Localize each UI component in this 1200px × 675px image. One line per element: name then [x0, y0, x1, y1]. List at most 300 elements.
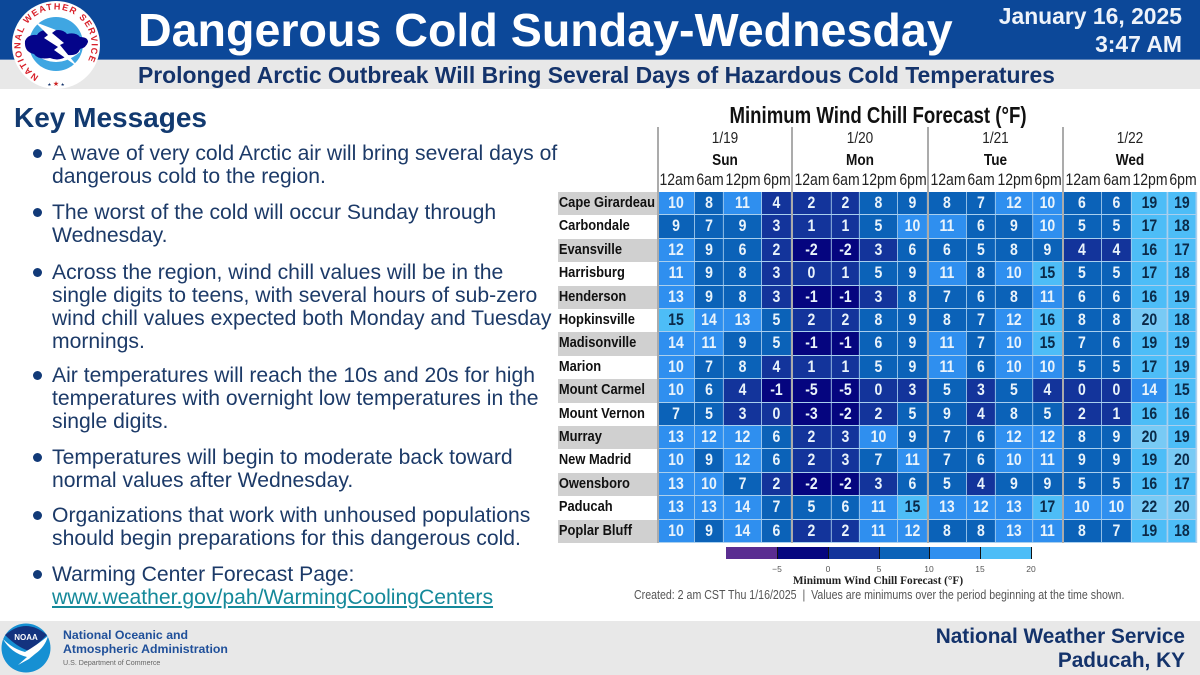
row: Cape Girardeau: 12	[1006, 194, 1022, 212]
row: Carbondale: 9	[739, 217, 746, 235]
row: Poplar Bluff: 18	[1174, 522, 1190, 540]
row: Owensboro: 9	[1043, 475, 1051, 493]
date and time: 3:47 AM	[1095, 31, 1182, 57]
row: Poplar Bluff: 6	[773, 522, 780, 540]
header band	[0, 0, 1200, 59]
row: Henderson: 13	[668, 288, 684, 306]
row: Harrisburg: 8	[977, 264, 985, 282]
date header: Sunday: Sun	[712, 152, 738, 169]
row: New Madrid: 19	[1142, 451, 1157, 469]
row: Paducah: 13	[701, 498, 717, 516]
subtitle band	[0, 59, 1200, 89]
time-of-day column headers: 12pm	[1132, 171, 1168, 189]
row: Harrisburg: 9	[909, 264, 916, 282]
row: Marion: 6	[977, 358, 985, 376]
row: Murray: 9	[909, 428, 916, 446]
key message 2: Wednesday.	[52, 224, 168, 247]
row: Owensboro: 10	[701, 475, 717, 493]
row: Owensboro: 17	[1174, 475, 1190, 493]
row: Poplar Bluff: 19	[1142, 522, 1157, 540]
key message 1: A wave of very cold Arctic air will bring several days of	[52, 142, 557, 165]
row: Poplar Bluff: 8	[943, 522, 951, 540]
key message 4: temperatures with overnight low temperatures in the	[52, 387, 538, 410]
row: Marion: 5	[875, 358, 882, 376]
date header: Tuesday: Tue	[984, 152, 1007, 169]
row: Murray: 3	[842, 428, 849, 446]
row: Madisonville: -1	[839, 334, 852, 352]
row: Carbondale: 9	[672, 217, 680, 235]
row: Owensboro: 5	[1078, 475, 1086, 493]
subtitle: Prolonged Arctic Outbreak Will Bring Several Days of Hazardous Cold Temperatures	[138, 62, 1055, 88]
row: Murray: 7	[943, 428, 951, 446]
row: Evansville: 17	[1174, 241, 1190, 259]
key message 5	[52, 446, 513, 492]
row: Henderson: 11	[1040, 288, 1055, 306]
row: Mount Carmel: -1	[770, 381, 783, 399]
footer band	[0, 621, 1200, 675]
row: Paducah: 17	[1040, 498, 1055, 516]
row: Paducah: 10	[1109, 498, 1124, 516]
row: Mount Vernon: 0	[773, 405, 780, 423]
row: Evansville: 2	[773, 241, 780, 259]
row: Mount Vernon: 7	[672, 405, 680, 423]
row: Poplar Bluff: 2	[842, 522, 849, 540]
row: New Madrid: 7	[875, 451, 882, 469]
row: Harrisburg: 8	[739, 264, 746, 282]
NOAA wordmark: National Oceanic and	[63, 628, 188, 642]
time-of-day column headers: 12am	[1065, 171, 1101, 189]
row: Marion: 11	[940, 358, 954, 376]
legend tick labels: 0	[826, 564, 830, 574]
row: Owensboro: 16	[1142, 475, 1157, 493]
row: Carbondale: 5	[1078, 217, 1086, 235]
row: Mount Carmel: 4	[1043, 381, 1051, 399]
row: Cape Girardeau: 10	[1040, 194, 1055, 212]
row: Poplar Bluff: 8	[1078, 522, 1086, 540]
NOAA wordmark	[63, 628, 228, 667]
row: Hopkinsville: 9	[909, 311, 916, 329]
row: New Madrid: 9	[1078, 451, 1086, 469]
row: Evansville: 12	[668, 241, 684, 259]
row: Paducah: 10	[1074, 498, 1090, 516]
row: Poplar Bluff: 13	[1006, 522, 1022, 540]
row: Harrisburg: 11	[940, 264, 954, 282]
row: Murray: 10	[871, 428, 886, 446]
row: Madisonville: 19	[1174, 334, 1190, 352]
row: Henderson: Henderson	[559, 288, 626, 305]
row: Marion: 5	[1078, 358, 1086, 376]
row: Henderson: 8	[1010, 288, 1018, 306]
row: Mount Carmel: 10	[668, 381, 684, 399]
row: Poplar Bluff: 2	[808, 522, 815, 540]
row: Murray: 12	[1040, 428, 1055, 446]
row: Poplar Bluff	[558, 520, 1197, 543]
row: Mount Carmel: 0	[875, 381, 882, 399]
row: Murray: 6	[977, 428, 985, 446]
row: Cape Girardeau: 2	[808, 194, 815, 212]
row: Carbondale: 5	[875, 217, 882, 235]
row: Evansville: -2	[805, 241, 818, 259]
row: Murray: 19	[1174, 428, 1190, 446]
row: Cape Girardeau: 11	[735, 194, 750, 212]
heading: Key Messages: Key Messages	[14, 102, 207, 133]
row: New Madrid: 10	[668, 451, 684, 469]
row: Paducah: 20	[1174, 498, 1190, 516]
row: Carbondale: 1	[842, 217, 849, 235]
row: Owensboro: -2	[839, 475, 852, 493]
legend tick labels: 10	[924, 564, 934, 574]
row: New Madrid: 3	[842, 451, 849, 469]
key message 1	[52, 142, 557, 188]
key message 6: should begin preparations for this dangerous cold.	[52, 527, 521, 550]
date header: Wednesday: 1/22	[1117, 130, 1143, 147]
row: New Madrid: 9	[1112, 451, 1120, 469]
row: Paducah: 22	[1142, 498, 1157, 516]
row: Hopkinsville: 2	[808, 311, 815, 329]
row: Mount Carmel: -5	[839, 381, 852, 399]
row: Mount Vernon: 2	[875, 405, 882, 423]
row: Cape Girardeau: Cape Girardeau	[559, 194, 655, 211]
row: Carbondale: 10	[1040, 217, 1055, 235]
row: Henderson: 3	[773, 288, 780, 306]
row: Mount Carmel: 14	[1142, 381, 1157, 399]
row: Carbondale: 11	[940, 217, 954, 235]
key message 4: Air temperatures will reach the 10s and 20s for high	[52, 364, 535, 387]
row: Evansville: 3	[875, 241, 882, 259]
row: Owensboro: 3	[875, 475, 882, 493]
row: Murray: 2	[808, 428, 815, 446]
row: Owensboro: 4	[977, 475, 985, 493]
row: Carbondale: Carbondale	[559, 217, 630, 234]
legend tick labels: 5	[877, 564, 881, 574]
row: Poplar Bluff: 7	[1112, 522, 1120, 540]
NOAA wordmark: U.S. Department of Commerce	[63, 659, 160, 667]
row: Mount Vernon: 16	[1174, 405, 1190, 423]
legend tick labels: −5	[772, 564, 782, 574]
row: Madisonville: 9	[739, 334, 746, 352]
row: Madisonville: Madisonville	[559, 334, 636, 351]
row: Harrisburg: 1	[842, 264, 849, 282]
row: Carbondale: 3	[773, 217, 780, 235]
date header: Monday: 1/20	[847, 130, 873, 147]
row: Marion: 7	[705, 358, 713, 376]
key message 2: The worst of the cold will occur Sunday through	[52, 201, 496, 224]
row: Mount Carmel: 6	[705, 381, 713, 399]
row: Madisonville: 7	[977, 334, 985, 352]
row: Harrisburg: 5	[1078, 264, 1086, 282]
row: Henderson: 19	[1174, 288, 1190, 306]
row: Poplar Bluff: Poplar Bluff	[559, 522, 632, 539]
table footnote: Created: 2 am CST Thu 1/16/2025 | Values are minimums over the period beginning at the time shown.	[634, 587, 1124, 602]
row: Paducah: 5	[808, 498, 815, 516]
row: Cape Girardeau: 6	[1112, 194, 1120, 212]
row: Henderson: 8	[909, 288, 916, 306]
legend tick labels	[772, 564, 1036, 574]
row: Evansville: 4	[1078, 241, 1086, 259]
row: Marion: 1	[842, 358, 849, 376]
row: Poplar Bluff: 11	[1040, 522, 1055, 540]
color legend bar	[726, 547, 1032, 559]
row: Owensboro: -2	[805, 475, 818, 493]
row: Hopkinsville	[558, 309, 1197, 332]
legend title: Minimum Wind Chill Forecast (°F)	[793, 575, 963, 587]
key message 3: mornings.	[52, 330, 145, 353]
row: Mount Vernon: 2	[1078, 405, 1086, 423]
row: Cape Girardeau	[558, 192, 1197, 215]
row: Marion: Marion	[559, 358, 601, 375]
heatmap title: Minimum Wind Chill Forecast (°F)	[729, 102, 1027, 128]
row: Henderson: 6	[1112, 288, 1120, 306]
row: Harrisburg: Harrisburg	[559, 264, 625, 281]
key message 6: Organizations that work with unhoused populations	[52, 504, 530, 527]
row: Henderson: 16	[1142, 288, 1157, 306]
time-of-day column headers: 6pm	[763, 171, 791, 189]
time-of-day column headers: 6am	[696, 171, 724, 189]
row: Marion: 9	[909, 358, 916, 376]
date header: Sunday: 1/19	[712, 130, 738, 147]
row: Paducah: 13	[1006, 498, 1022, 516]
row: Carbondale: 5	[1112, 217, 1120, 235]
row: Hopkinsville: 5	[773, 311, 780, 329]
key message 7: warming center link: www.weather.gov/pah/WarmingCoolingCenters	[52, 586, 493, 609]
key message 7: warming center link	[52, 563, 493, 609]
row: Marion: 17	[1142, 358, 1157, 376]
row: New Madrid: 11	[1040, 451, 1055, 469]
row: Murray: 9	[1112, 428, 1120, 446]
row: Mount Vernon: 9	[943, 405, 951, 423]
date and time: January 16, 2025	[999, 3, 1182, 29]
row: Harrisburg: 5	[875, 264, 882, 282]
row: Paducah: 13	[939, 498, 955, 516]
row: Harrisburg: 5	[1112, 264, 1120, 282]
row: Mount Vernon: -2	[839, 405, 852, 423]
row: Evansville	[558, 239, 1197, 262]
row: Mount Vernon: 5	[909, 405, 916, 423]
time-of-day column headers: 12pm	[725, 171, 761, 189]
row: New Madrid: 9	[705, 451, 713, 469]
row: Murray: 13	[668, 428, 684, 446]
row: Evansville: 9	[705, 241, 713, 259]
time-of-day column headers: 6am	[967, 171, 995, 189]
icon: National Weather Service logo: NATIONAL WEATHER SERVICE	[14, 3, 98, 82]
row: Harrisburg: 17	[1142, 264, 1157, 282]
row: Poplar Bluff: 12	[905, 522, 920, 540]
NOAA wordmark: Atmospheric Administration	[63, 642, 228, 656]
row: Paducah: 15	[905, 498, 920, 516]
row: Henderson: 3	[875, 288, 882, 306]
row: Madisonville: 14	[668, 334, 684, 352]
row: Mount Vernon: 16	[1142, 405, 1157, 423]
row: New Madrid: New Madrid	[559, 451, 631, 468]
key message 3: wind chill values expected both Monday and Tuesday	[52, 307, 551, 330]
time-of-day column headers: 6pm	[1169, 171, 1197, 189]
icon: NOAA logo: NOAA	[14, 633, 38, 642]
row: Hopkinsville: 12	[1006, 311, 1022, 329]
row: Poplar Bluff: 9	[705, 522, 713, 540]
row: Carbondale: 10	[905, 217, 920, 235]
row: Mount Carmel: 3	[909, 381, 916, 399]
row: Marion: 5	[1112, 358, 1120, 376]
row: Paducah: 12	[973, 498, 989, 516]
row: Murray: 8	[1078, 428, 1086, 446]
time-of-day column headers: 12am	[794, 171, 830, 189]
row: Mount Carmel	[558, 379, 1197, 403]
row: Murray: 20	[1142, 428, 1157, 446]
row: Madisonville	[558, 332, 1197, 356]
row: Owensboro: 7	[739, 475, 746, 493]
row: Madisonville: 11	[940, 334, 954, 352]
row: Henderson: 8	[739, 288, 746, 306]
key message 3: Across the region, wind chill values will be in the	[52, 261, 503, 284]
time-of-day column headers: 12pm	[861, 171, 897, 189]
row: Evansville: 4	[1112, 241, 1120, 259]
row: Poplar Bluff: 10	[668, 522, 684, 540]
row: Madisonville: 19	[1142, 334, 1157, 352]
key message 3: single digits to teens, with several hours of sub-zero	[52, 284, 537, 307]
row: Mount Vernon: 5	[705, 405, 713, 423]
row: Murray	[558, 426, 1197, 449]
row: Murray: 12	[735, 428, 750, 446]
row: Evansville: 6	[943, 241, 951, 259]
row: Mount Vernon: 4	[977, 405, 985, 423]
date header: Tuesday	[982, 130, 1009, 169]
row: Owensboro: 5	[943, 475, 951, 493]
row: Paducah: 14	[735, 498, 750, 516]
date and time	[999, 3, 1182, 57]
row: Mount Vernon	[558, 403, 1197, 426]
row: Mount Carmel: 4	[739, 381, 746, 399]
row: Murray: 6	[773, 428, 780, 446]
row: Marion: 19	[1174, 358, 1190, 376]
title: Dangerous Cold Sunday-Wednesday	[138, 4, 953, 56]
row: Carbondale: 9	[1010, 217, 1018, 235]
row: Marion: 10	[668, 358, 684, 376]
row: Cape Girardeau: 8	[705, 194, 713, 212]
time-of-day column headers: 12am	[659, 171, 695, 189]
row: Paducah: 6	[842, 498, 849, 516]
row: Owensboro: 9	[1010, 475, 1018, 493]
row: Hopkinsville: 20	[1142, 311, 1157, 329]
row: Mount Carmel: 0	[1112, 381, 1120, 399]
row: Mount Vernon: 5	[1043, 405, 1051, 423]
date header: Sunday	[712, 130, 738, 169]
row: Hopkinsville: 8	[1078, 311, 1086, 329]
row: Poplar Bluff: 14	[735, 522, 750, 540]
row: Cape Girardeau: 7	[977, 194, 985, 212]
row: New Madrid: 20	[1174, 451, 1190, 469]
row: Cape Girardeau: 9	[909, 194, 916, 212]
row: Cape Girardeau: 19	[1142, 194, 1157, 212]
row: Madisonville: 10	[1006, 334, 1022, 352]
legend tick labels: 20	[1026, 564, 1036, 574]
time-of-day column headers: 6am	[1103, 171, 1131, 189]
key message 7: warming center link: Warming Center Forecast Page:	[52, 563, 354, 586]
row: Cape Girardeau: 2	[842, 194, 849, 212]
time-of-day column headers: 12pm	[997, 171, 1033, 189]
row: Mount Vernon: Mount Vernon	[559, 405, 645, 422]
row: Hopkinsville: 13	[735, 311, 750, 329]
icon: National Weather Service logo: ★ ★ ★	[47, 80, 65, 88]
row: Paducah: Paducah	[559, 498, 613, 515]
row: Madisonville: 6	[875, 334, 882, 352]
row: Mount Carmel: -5	[805, 381, 818, 399]
row: Hopkinsville: 18	[1174, 311, 1190, 329]
row: Evansville: Evansville	[559, 241, 622, 258]
row: Mount Carmel: Mount Carmel	[559, 381, 645, 398]
row: Hopkinsville: 14	[701, 311, 717, 329]
row: Henderson: -1	[805, 288, 818, 306]
key message 3	[52, 261, 551, 353]
key message 6	[52, 504, 530, 550]
date header: Wednesday: Wed	[1116, 152, 1144, 169]
row: Poplar Bluff: 11	[871, 522, 886, 540]
row: Madisonville: 5	[773, 334, 780, 352]
row: Madisonville: 11	[702, 334, 716, 352]
row: Evansville: -2	[839, 241, 852, 259]
row: Paducah	[558, 496, 1197, 520]
row: Carbondale: 6	[977, 217, 985, 235]
row: New Madrid: 2	[808, 451, 815, 469]
row: Hopkinsville: Hopkinsville	[559, 311, 635, 328]
row: Mount Carmel: 15	[1174, 381, 1190, 399]
date header: Monday	[846, 130, 874, 169]
row: Cape Girardeau: 19	[1174, 194, 1190, 212]
row: Mount Vernon: 8	[1010, 405, 1018, 423]
row: Carbondale	[558, 215, 1197, 239]
key message 4: single digits.	[52, 410, 168, 433]
row: Marion: 10	[1040, 358, 1055, 376]
row: Henderson: 7	[943, 288, 951, 306]
row: Henderson	[558, 286, 1197, 309]
row: Mount Vernon: -3	[805, 405, 818, 423]
row: Harrisburg	[558, 262, 1197, 286]
row: Mount Carmel: 5	[1010, 381, 1018, 399]
row: Cape Girardeau: 6	[1078, 194, 1086, 212]
row: Murray: Murray	[559, 428, 602, 445]
row: New Madrid: 6	[773, 451, 780, 469]
row: Hopkinsville: 8	[943, 311, 951, 329]
time-of-day column headers: 6am	[832, 171, 860, 189]
row: Mount Carmel: 3	[977, 381, 985, 399]
row: Cape Girardeau: 4	[773, 194, 780, 212]
row: Hopkinsville: 8	[875, 311, 882, 329]
office name: National Weather Service	[936, 625, 1185, 648]
row: Marion: 8	[739, 358, 746, 376]
key message 1: dangerous cold to the region.	[52, 165, 326, 188]
row: Henderson: -1	[839, 288, 852, 306]
key message 4	[52, 364, 538, 433]
row: Marion: 1	[808, 358, 815, 376]
row: Henderson: 6	[977, 288, 985, 306]
row: Evansville: 5	[977, 241, 985, 259]
row: Marion: 4	[773, 358, 780, 376]
row: Hopkinsville: 15	[668, 311, 684, 329]
row: Evansville: 6	[909, 241, 916, 259]
row: Carbondale: 1	[808, 217, 815, 235]
row: Paducah: 11	[871, 498, 886, 516]
row: Mount Vernon: 1	[1112, 405, 1120, 423]
row: New Madrid: 6	[977, 451, 985, 469]
row: Cape Girardeau: 8	[943, 194, 951, 212]
row: Evansville: 9	[1043, 241, 1051, 259]
row: Poplar Bluff: 8	[977, 522, 985, 540]
row: Madisonville: 15	[1040, 334, 1055, 352]
office name: Paducah, KY	[1058, 649, 1185, 672]
row: Evansville: 6	[739, 241, 746, 259]
row: Cape Girardeau: 8	[875, 194, 882, 212]
row: Harrisburg: 0	[808, 264, 815, 282]
row: Marion	[558, 356, 1197, 379]
